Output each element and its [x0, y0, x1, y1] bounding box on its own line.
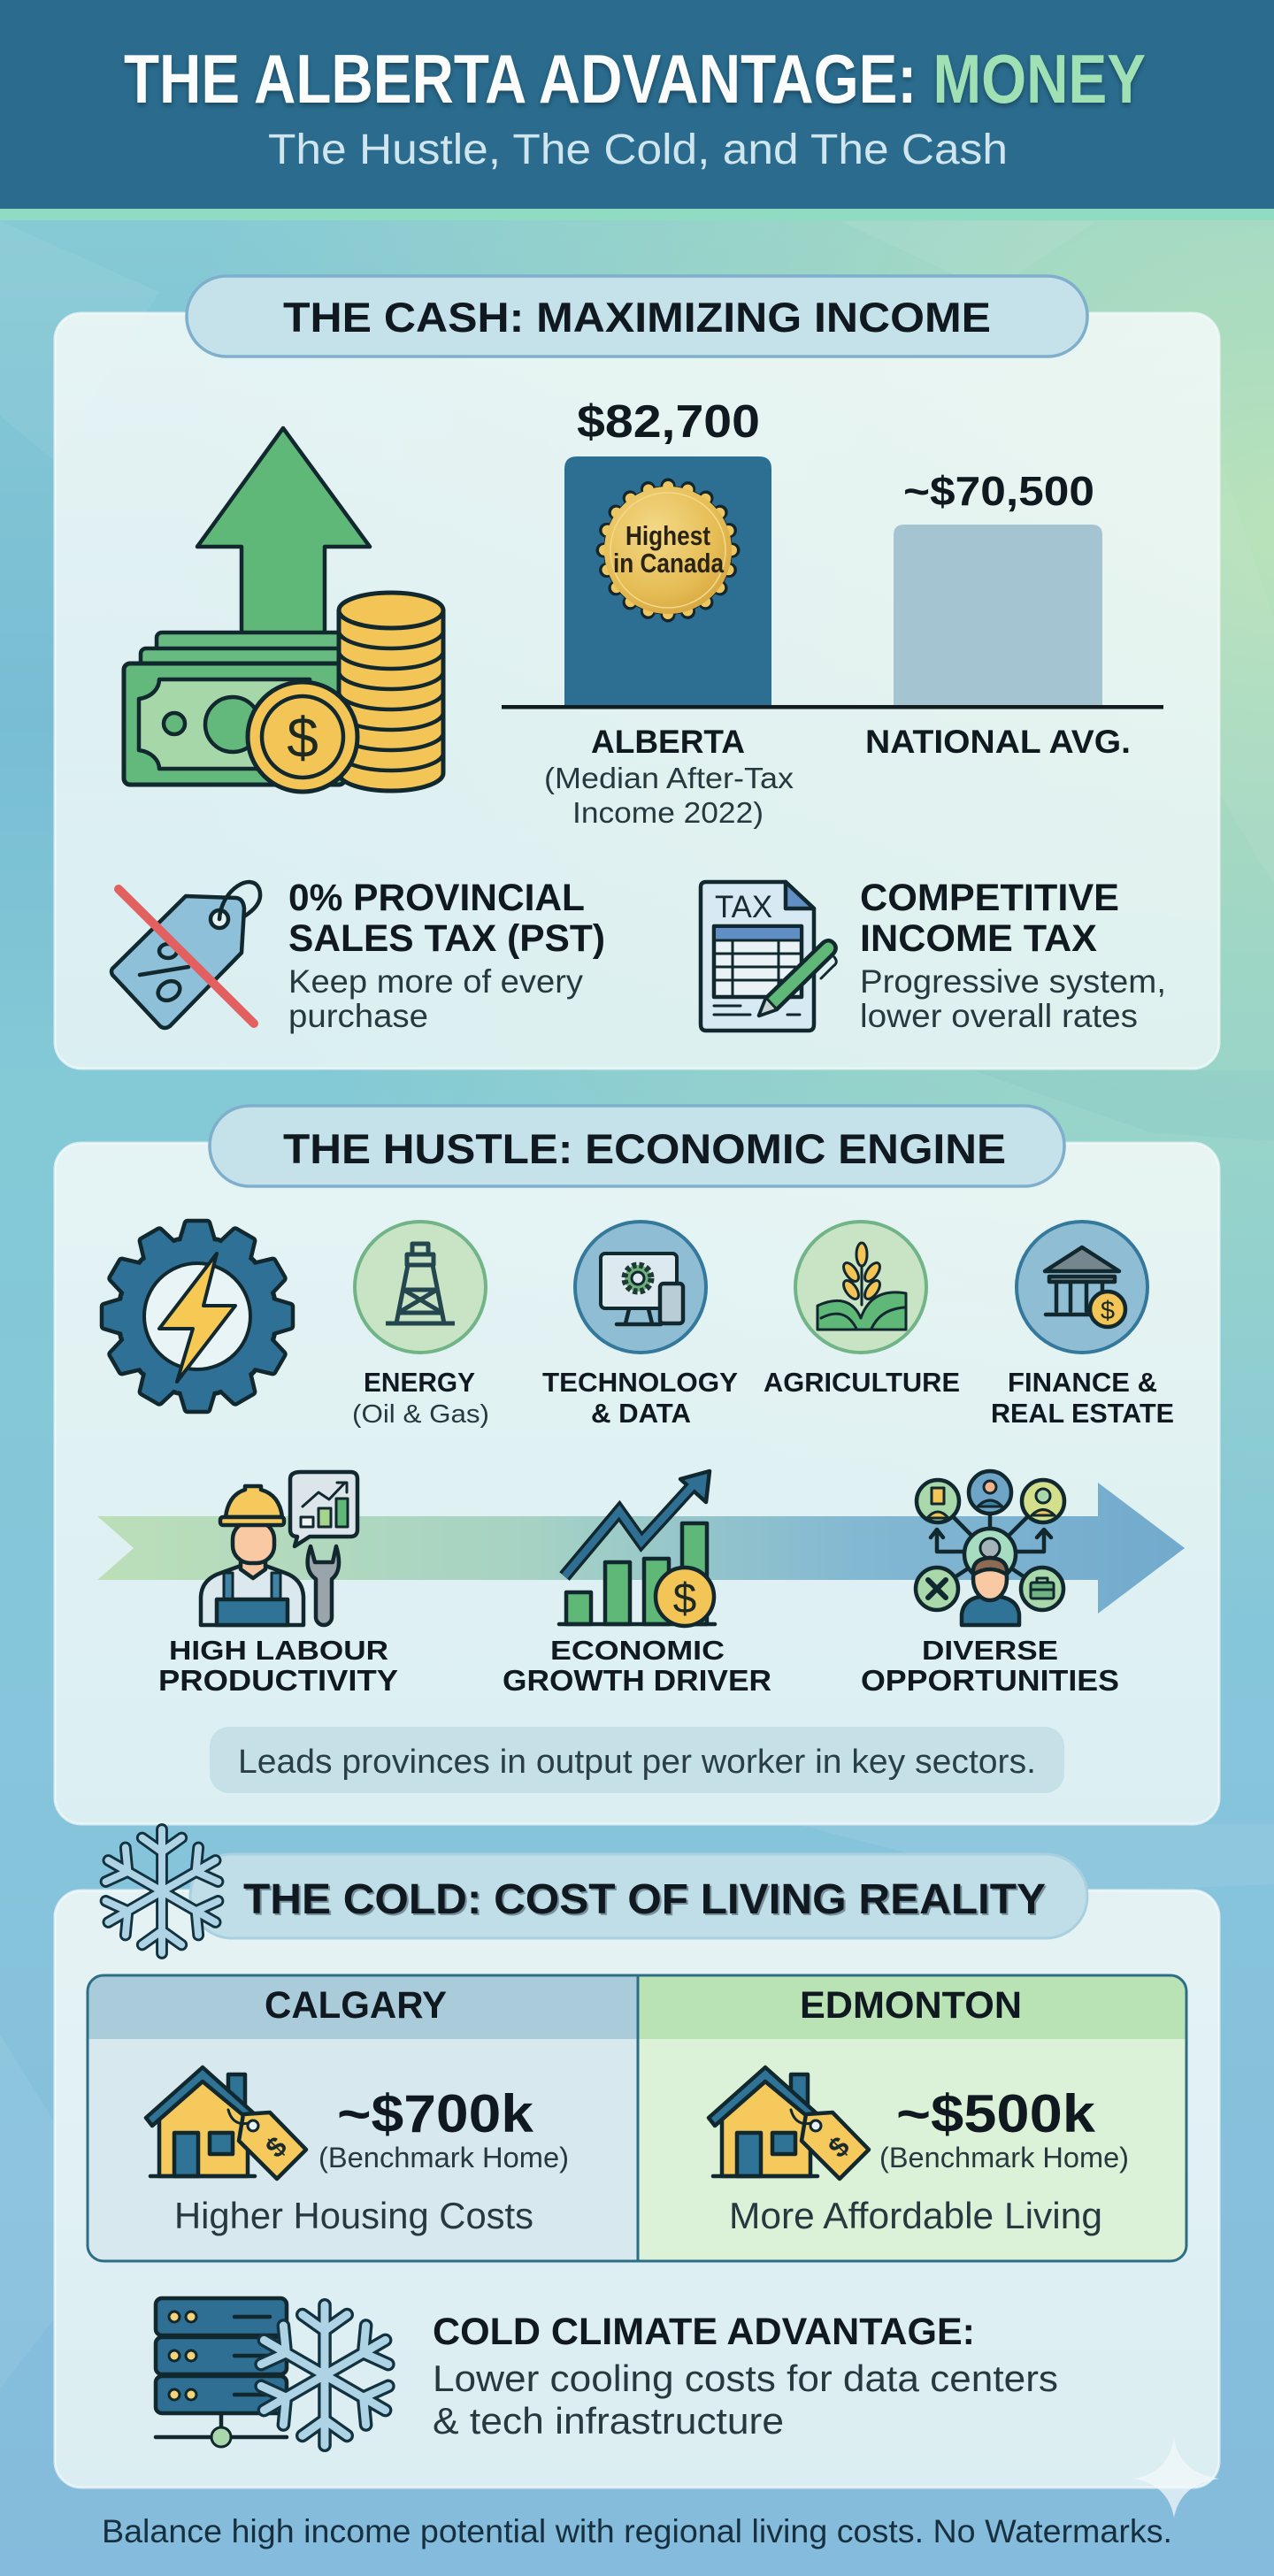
text: competitive income tax: lower overall rates: [860, 998, 1138, 1034]
label: agriculture: AGRICULTURE: [764, 1367, 960, 1398]
label: alberta: ALBERTA: [591, 724, 745, 760]
bar: national average: [894, 525, 1102, 707]
badge: highest in canada: [603, 486, 733, 615]
sector: agriculture: [764, 1222, 960, 1398]
text: cold climate advantage: Lower cooling costs for data centers: [433, 2358, 1058, 2399]
cash heading: [187, 276, 1087, 356]
icon: money stack with up arrow: $: [287, 706, 318, 770]
panel: the cold: [55, 1829, 1219, 2488]
hustle panel card: [55, 1143, 1219, 1824]
label: diverse opportunities: [861, 1635, 1119, 1697]
label: finance and real estate: REAL ESTATE: [991, 1398, 1174, 1429]
icon: tax form and pen: [701, 882, 836, 1031]
title: THE ALBERTA ADVANTAGE: MONEY: [124, 40, 1146, 118]
bar: alberta: [564, 456, 771, 707]
column: edmonton: ~$500k: [896, 2084, 1096, 2143]
cold heading: THE COLD: COST OF LIVING REALITY: [243, 1876, 1046, 1923]
text: zero provincial sales tax: 0% PROVINCIAL: [288, 877, 585, 919]
label: technology and data: [542, 1367, 738, 1429]
sector: finance and real estate: [991, 1222, 1174, 1429]
panel: the cash: [55, 276, 1219, 1069]
icon: growth chart: $: [673, 1576, 696, 1622]
cold heading: [190, 1854, 1087, 1938]
icon: house with price tag: [146, 2067, 306, 2179]
callout: output per worker: [210, 1727, 1064, 1793]
label: finance and real estate: FINANCE &: [1008, 1367, 1157, 1398]
column: calgary: (Benchmark Home): [318, 2142, 569, 2174]
column: calgary: ~$700k: [337, 2084, 534, 2143]
text: cold climate advantage: & tech infrastructure: [433, 2400, 784, 2442]
label: technology and data: & DATA: [591, 1398, 691, 1429]
icon: worker: [201, 1472, 357, 1625]
icon: growth chart: [559, 1471, 715, 1626]
label: finance and real estate: [991, 1367, 1174, 1429]
label: economic growth driver: ECONOMIC: [550, 1635, 725, 1666]
label: median after-tax income: [544, 762, 794, 829]
label: median after-tax income: (Median After-Tax: [544, 762, 794, 794]
text: competitive income tax: COMPETITIVE: [860, 877, 1119, 919]
column: calgary: Higher Housing Costs: [174, 2195, 533, 2236]
callout: output per worker: Leads provinces in output per worker in key sectors.: [238, 1744, 1036, 1781]
text: competitive income tax: Progressive system,: [860, 963, 1166, 1000]
label: energy: [352, 1367, 489, 1429]
text: zero provincial sales tax: SALES TAX (PST): [288, 917, 605, 960]
sector: energy: [352, 1222, 489, 1429]
column: edmonton: EDMONTON: [800, 1984, 1022, 2027]
label: high labour productivity: [158, 1635, 398, 1697]
label: high labour productivity: HIGH LABOUR: [169, 1635, 388, 1666]
hustle heading: [210, 1106, 1064, 1186]
label: economic growth driver: [503, 1635, 771, 1697]
label: economic growth driver: GROWTH DRIVER: [503, 1664, 771, 1697]
cash heading: THE CASH: MAXIMIZING INCOME: [283, 294, 991, 341]
text: zero provincial sales tax: Keep more of every: [288, 963, 584, 1000]
table outline: [88, 1975, 1186, 2261]
text: cold climate advantage: [433, 2311, 1058, 2442]
label: median after-tax income: Income 2022): [572, 796, 764, 829]
text: competitive income tax: [860, 877, 1166, 1034]
label: technology and data: TECHNOLOGY: [542, 1367, 738, 1398]
column: edmonton: (Benchmark Home): [879, 2142, 1129, 2174]
icon: money stack with up arrow: [124, 428, 443, 792]
bar chart: median income: [502, 396, 1163, 829]
column: edmonton: More Affordable Living: [729, 2195, 1102, 2236]
sector: finance and real estate: $: [1101, 1297, 1115, 1325]
column: calgary: CALGARY: [265, 1984, 447, 2027]
text: competitive income tax: INCOME TAX: [860, 917, 1097, 960]
icon: house with price tag: [709, 2067, 869, 2179]
label: energy: (Oil & Gas): [352, 1400, 489, 1429]
header banner: [0, 0, 1274, 220]
footer note: Balance high income potential with regional living costs. No Watermarks.: [102, 2513, 1172, 2549]
value: alberta: $82,700: [577, 396, 760, 448]
sparkle: [1133, 2437, 1219, 2518]
cold panel card: [55, 1890, 1219, 2488]
text: zero provincial sales tax: [288, 877, 605, 1034]
text: cold climate advantage: COLD CLIMATE ADVANTAGE:: [433, 2311, 975, 2353]
badge: highest in canada: in Canada: [613, 548, 725, 579]
cold heading: THE COLD: COST OF LIVING REALITY: [245, 1878, 1048, 1925]
badge: highest in canada: Highest: [625, 520, 710, 551]
comparison table: calgary vs edmonton: [88, 1975, 1186, 2261]
arrow: progress band: [97, 1483, 1185, 1614]
icon: server with snowflake: [156, 2298, 396, 2447]
icon: tax form and pen: TAX: [715, 890, 772, 924]
label: diverse opportunities: DIVERSE: [922, 1635, 1058, 1666]
icon: gear with lightning bolt: [102, 1221, 293, 1412]
cash panel card: [55, 313, 1219, 1069]
label: national average: NATIONAL AVG.: [865, 724, 1131, 760]
icon: diverse opportunities network: [916, 1471, 1064, 1625]
text: zero provincial sales tax: purchase: [288, 998, 428, 1034]
icon: snowflake: [98, 1829, 226, 1953]
value: national average: ~$70,500: [903, 468, 1094, 514]
panel: the hustle: [55, 1106, 1219, 1824]
sector: technology and data: [542, 1222, 738, 1429]
hustle heading: THE HUSTLE: ECONOMIC ENGINE: [283, 1125, 1006, 1172]
label: diverse opportunities: OPPORTUNITIES: [861, 1664, 1119, 1697]
label: high labour productivity: PRODUCTIVITY: [158, 1664, 398, 1697]
icon: crossed-out price tag: [111, 882, 260, 1028]
column: edmonton: [638, 1975, 1186, 2261]
axis baseline: [502, 705, 1163, 709]
label: energy: ENERGY: [364, 1367, 475, 1398]
column: calgary: [88, 1975, 638, 2261]
subtitle: The Hustle, The Cold, and The Cash: [268, 126, 1008, 173]
